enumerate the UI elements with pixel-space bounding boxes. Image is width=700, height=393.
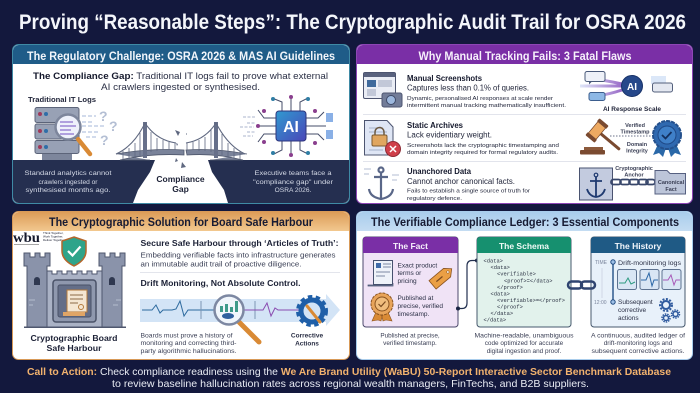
code sample: <data>	[490, 292, 510, 298]
flaw 2 text: Static Archives	[407, 121, 464, 130]
compliance gap statement: The Compliance Gap: Traditional IT logs fail to prove what external	[33, 71, 328, 81]
icon: AI chip with circuits	[240, 95, 333, 157]
label: cryptographic anchor	[615, 166, 653, 178]
caption: fact	[380, 332, 440, 347]
text: boards must prove: monitoring and correcting third-	[140, 340, 236, 347]
label: safe harbour	[30, 333, 118, 353]
diagram: drift monitoring arrow	[140, 294, 340, 342]
call to action: to review baseline hallucination rates across regional wealth managers, FinTechs, and B2B suppliers.	[112, 379, 589, 390]
icon: AI response scale: AI	[627, 82, 637, 93]
compliance gap statement	[33, 71, 328, 92]
card heading: The Schema	[499, 241, 549, 251]
panel: regulatory challenge	[12, 44, 350, 204]
mini charts	[618, 270, 681, 290]
icon: chain link	[568, 282, 595, 288]
call to action	[27, 367, 671, 390]
text: subsequent actions: actions	[618, 315, 639, 322]
text: subsequent actions: Subsequent	[618, 299, 653, 306]
heading: Why Manual Tracking Fails: 3 Fatal Flaws	[418, 49, 632, 63]
arrow: fact to schema connector	[456, 258, 479, 310]
logo: wbu: Think Together,	[43, 231, 64, 235]
panel: why manual tracking fails	[356, 44, 692, 204]
icon: medal	[371, 293, 393, 321]
label: cryptographic anchor: Cryptographic	[615, 166, 653, 172]
label: corrective actions: Corrective	[291, 332, 323, 340]
code sample: </proof>	[497, 285, 523, 291]
flaw 3 text	[407, 167, 530, 202]
icon: cryptographic anchor to canonical fact: Canonical	[658, 180, 685, 186]
label: compliance gap: Gap	[172, 184, 189, 194]
caption: standard analytics: Standard analytics cannot	[24, 170, 112, 177]
text: published at: timestamp.	[398, 311, 429, 318]
caption: standard analytics: synthesised months ago.	[26, 187, 111, 194]
label: AI Response Scale	[603, 106, 661, 113]
icon: broken bridge	[116, 122, 247, 168]
icon: anchor	[364, 168, 399, 199]
flaw 2 text	[407, 121, 559, 156]
compliance gap statement: AI crawlers ingested or synthesised.	[101, 82, 260, 92]
code sample: <verifiable>	[497, 272, 536, 278]
icon: server with magnifier	[35, 108, 118, 160]
label: compliance gap	[156, 174, 205, 194]
text: secure safe harbour: Secure Safe Harbour through ‘Articles of Truth’:	[140, 238, 339, 248]
label: verified timestamp	[621, 123, 650, 136]
icon: document	[368, 260, 393, 286]
label: domain integrity: Domain	[627, 142, 648, 148]
heading: The Regulatory Challenge: OSRA 2026 & MAS AI Guidelines	[27, 51, 335, 63]
caption: executive teams: "compliance gap" under	[253, 179, 334, 186]
flaw 3 text: regulatory defence.	[407, 196, 462, 202]
code sample: <verifiable>=</proof>	[497, 298, 565, 304]
card: the schema	[477, 237, 571, 327]
flaw 3 text: Fails to establish a single source of truth for	[407, 188, 530, 194]
caption: schema: Machine-readable, unambiguous	[474, 332, 574, 340]
flaw 2 text: Screenshots lack the cryptographic timestamping and	[407, 143, 559, 149]
label: corrective actions	[291, 332, 323, 348]
caption: schema: code optimized for accurate	[485, 340, 564, 347]
text: exact product: pricing	[398, 278, 417, 285]
caption: standard analytics	[24, 170, 112, 194]
label: verified timestamp: Verified	[625, 123, 645, 129]
text: exact product: terms or	[398, 270, 422, 277]
icon: castle with safe	[24, 253, 126, 328]
logo: wbu: wbu	[13, 231, 40, 246]
label: domain integrity	[626, 142, 649, 154]
text: secure safe harbour: Embedding verifiable facts into infrastructure generates	[140, 252, 336, 260]
text: subsequent actions	[618, 299, 653, 322]
code sample: </data>	[484, 318, 506, 324]
text: boards must prove	[140, 332, 237, 355]
caption: schema	[474, 332, 574, 355]
text: exact product: Exact product	[398, 262, 437, 270]
code sample: <data>	[490, 265, 510, 271]
label: cryptographic anchor: Anchor	[624, 172, 644, 178]
flaw 1 text: Manual Screenshots	[407, 74, 483, 83]
text: published at	[398, 295, 443, 318]
text: published at: Published at	[398, 295, 433, 302]
card: the history	[591, 237, 685, 327]
text: boards must prove: Boards must prove a history of	[140, 332, 233, 340]
caption: executive teams: OSRA 2026.	[275, 187, 311, 194]
flaw 1 text: Captures less than 0.1% of queries.	[407, 84, 529, 92]
icon: server with magnifier: ?	[109, 118, 118, 134]
caption: schema: digital ingestion and proof.	[487, 348, 562, 355]
icon: cryptographic anchor to canonical fact: Fact	[665, 187, 677, 193]
card heading: The Fact	[393, 241, 428, 251]
icon: price tag	[429, 265, 455, 289]
icon: gavel	[580, 118, 627, 158]
text: boards must prove: party algorithmic hallucinations.	[140, 348, 237, 355]
code sample: <proof>=</data>	[504, 278, 553, 284]
heading: The Cryptographic Solution for Board Safe Harbour	[49, 215, 313, 229]
text: published at: precise, verified	[398, 303, 443, 310]
code sample: <data>	[484, 258, 503, 264]
icon: cryptographic anchor to canonical fact	[580, 168, 686, 200]
label: safe harbour: Cryptographic Board	[30, 333, 118, 343]
text: drift logs: Drift-monitoring logs	[618, 260, 682, 267]
logo: wbu	[13, 231, 65, 246]
label: verified timestamp: Timestamp	[621, 130, 650, 136]
caption: history: drift-monitoring logs and	[604, 340, 673, 347]
caption: history: A continuous, audited ledger of	[591, 332, 685, 340]
timeline	[594, 260, 615, 306]
icon: AI response scale	[580, 72, 672, 113]
flaw 2 text: Lack evidentiary weight.	[407, 130, 492, 140]
icon: server with magnifier: ?	[100, 132, 109, 148]
logo: wbu: Deliver Together	[43, 238, 65, 242]
text: exact product	[398, 262, 437, 285]
text: secure safe harbour	[140, 238, 339, 268]
panel: compliance ledger	[356, 212, 692, 360]
icon: shield check	[62, 237, 86, 266]
text: drift monitoring: Drift Monitoring, Not Absolute Control.	[140, 278, 300, 288]
label: corrective actions: Actions	[295, 340, 319, 348]
caption: history	[591, 332, 685, 355]
code sample: </data>	[490, 311, 513, 317]
caption: fact: verified timestamp.	[383, 340, 437, 347]
icon: gears	[660, 299, 680, 322]
panel: cryptographic solution	[12, 212, 350, 360]
text: secure safe harbour: an immutable audit trail of proactive diligence.	[140, 262, 302, 268]
code sample: </proof>	[497, 304, 523, 310]
icon: verified badge	[610, 121, 681, 157]
icon: AI chip with circuits: AI	[283, 119, 299, 136]
icon: server with magnifier: ?	[99, 108, 108, 124]
dark footer band with gap	[13, 160, 349, 203]
flaw 1 text: intermittent manual tracking mathematically insufficient.	[407, 103, 566, 109]
label: domain integrity: Integrity	[626, 148, 649, 154]
text: subsequent actions: corrective	[618, 307, 647, 314]
icon: locked document	[364, 120, 400, 156]
logo: wbu: Work Together,	[43, 234, 63, 238]
card heading: The History	[615, 241, 662, 251]
timeline: TIME	[595, 260, 608, 266]
icon: browser screenshot with camera	[364, 72, 402, 107]
code sample	[484, 258, 565, 324]
timeline: 12:00	[594, 300, 607, 306]
caption: executive teams	[253, 170, 334, 194]
flaw 2 text: domain integrity required for formal regulatory audits.	[407, 150, 558, 156]
caption: fact: Published at precise,	[380, 332, 440, 340]
label: traditional IT logs: Traditional IT Logs	[28, 97, 96, 104]
flaw 3 text: Unanchored Data	[407, 167, 472, 176]
caption: standard analytics: crawlers ingested or	[38, 179, 98, 186]
call to action: Call to Action: Check compliance readiness using the We Are Brand Utility (WaBU) 50-Report Interactive Sector Benchmark Database	[27, 367, 671, 378]
flaw 3 text: Cannot anchor canonical facts.	[407, 177, 515, 186]
label: compliance gap: Compliance	[156, 174, 205, 184]
flaw 1 text: Dynamic, personalised AI responses at scale render	[407, 96, 553, 102]
caption: history: subsequent corrective actions.	[592, 348, 685, 355]
card: the fact	[363, 237, 458, 327]
label: safe harbour: Safe Harbour	[46, 343, 102, 353]
flaw 1 text	[407, 74, 566, 109]
caption: executive teams: Executive teams face a	[254, 170, 332, 177]
